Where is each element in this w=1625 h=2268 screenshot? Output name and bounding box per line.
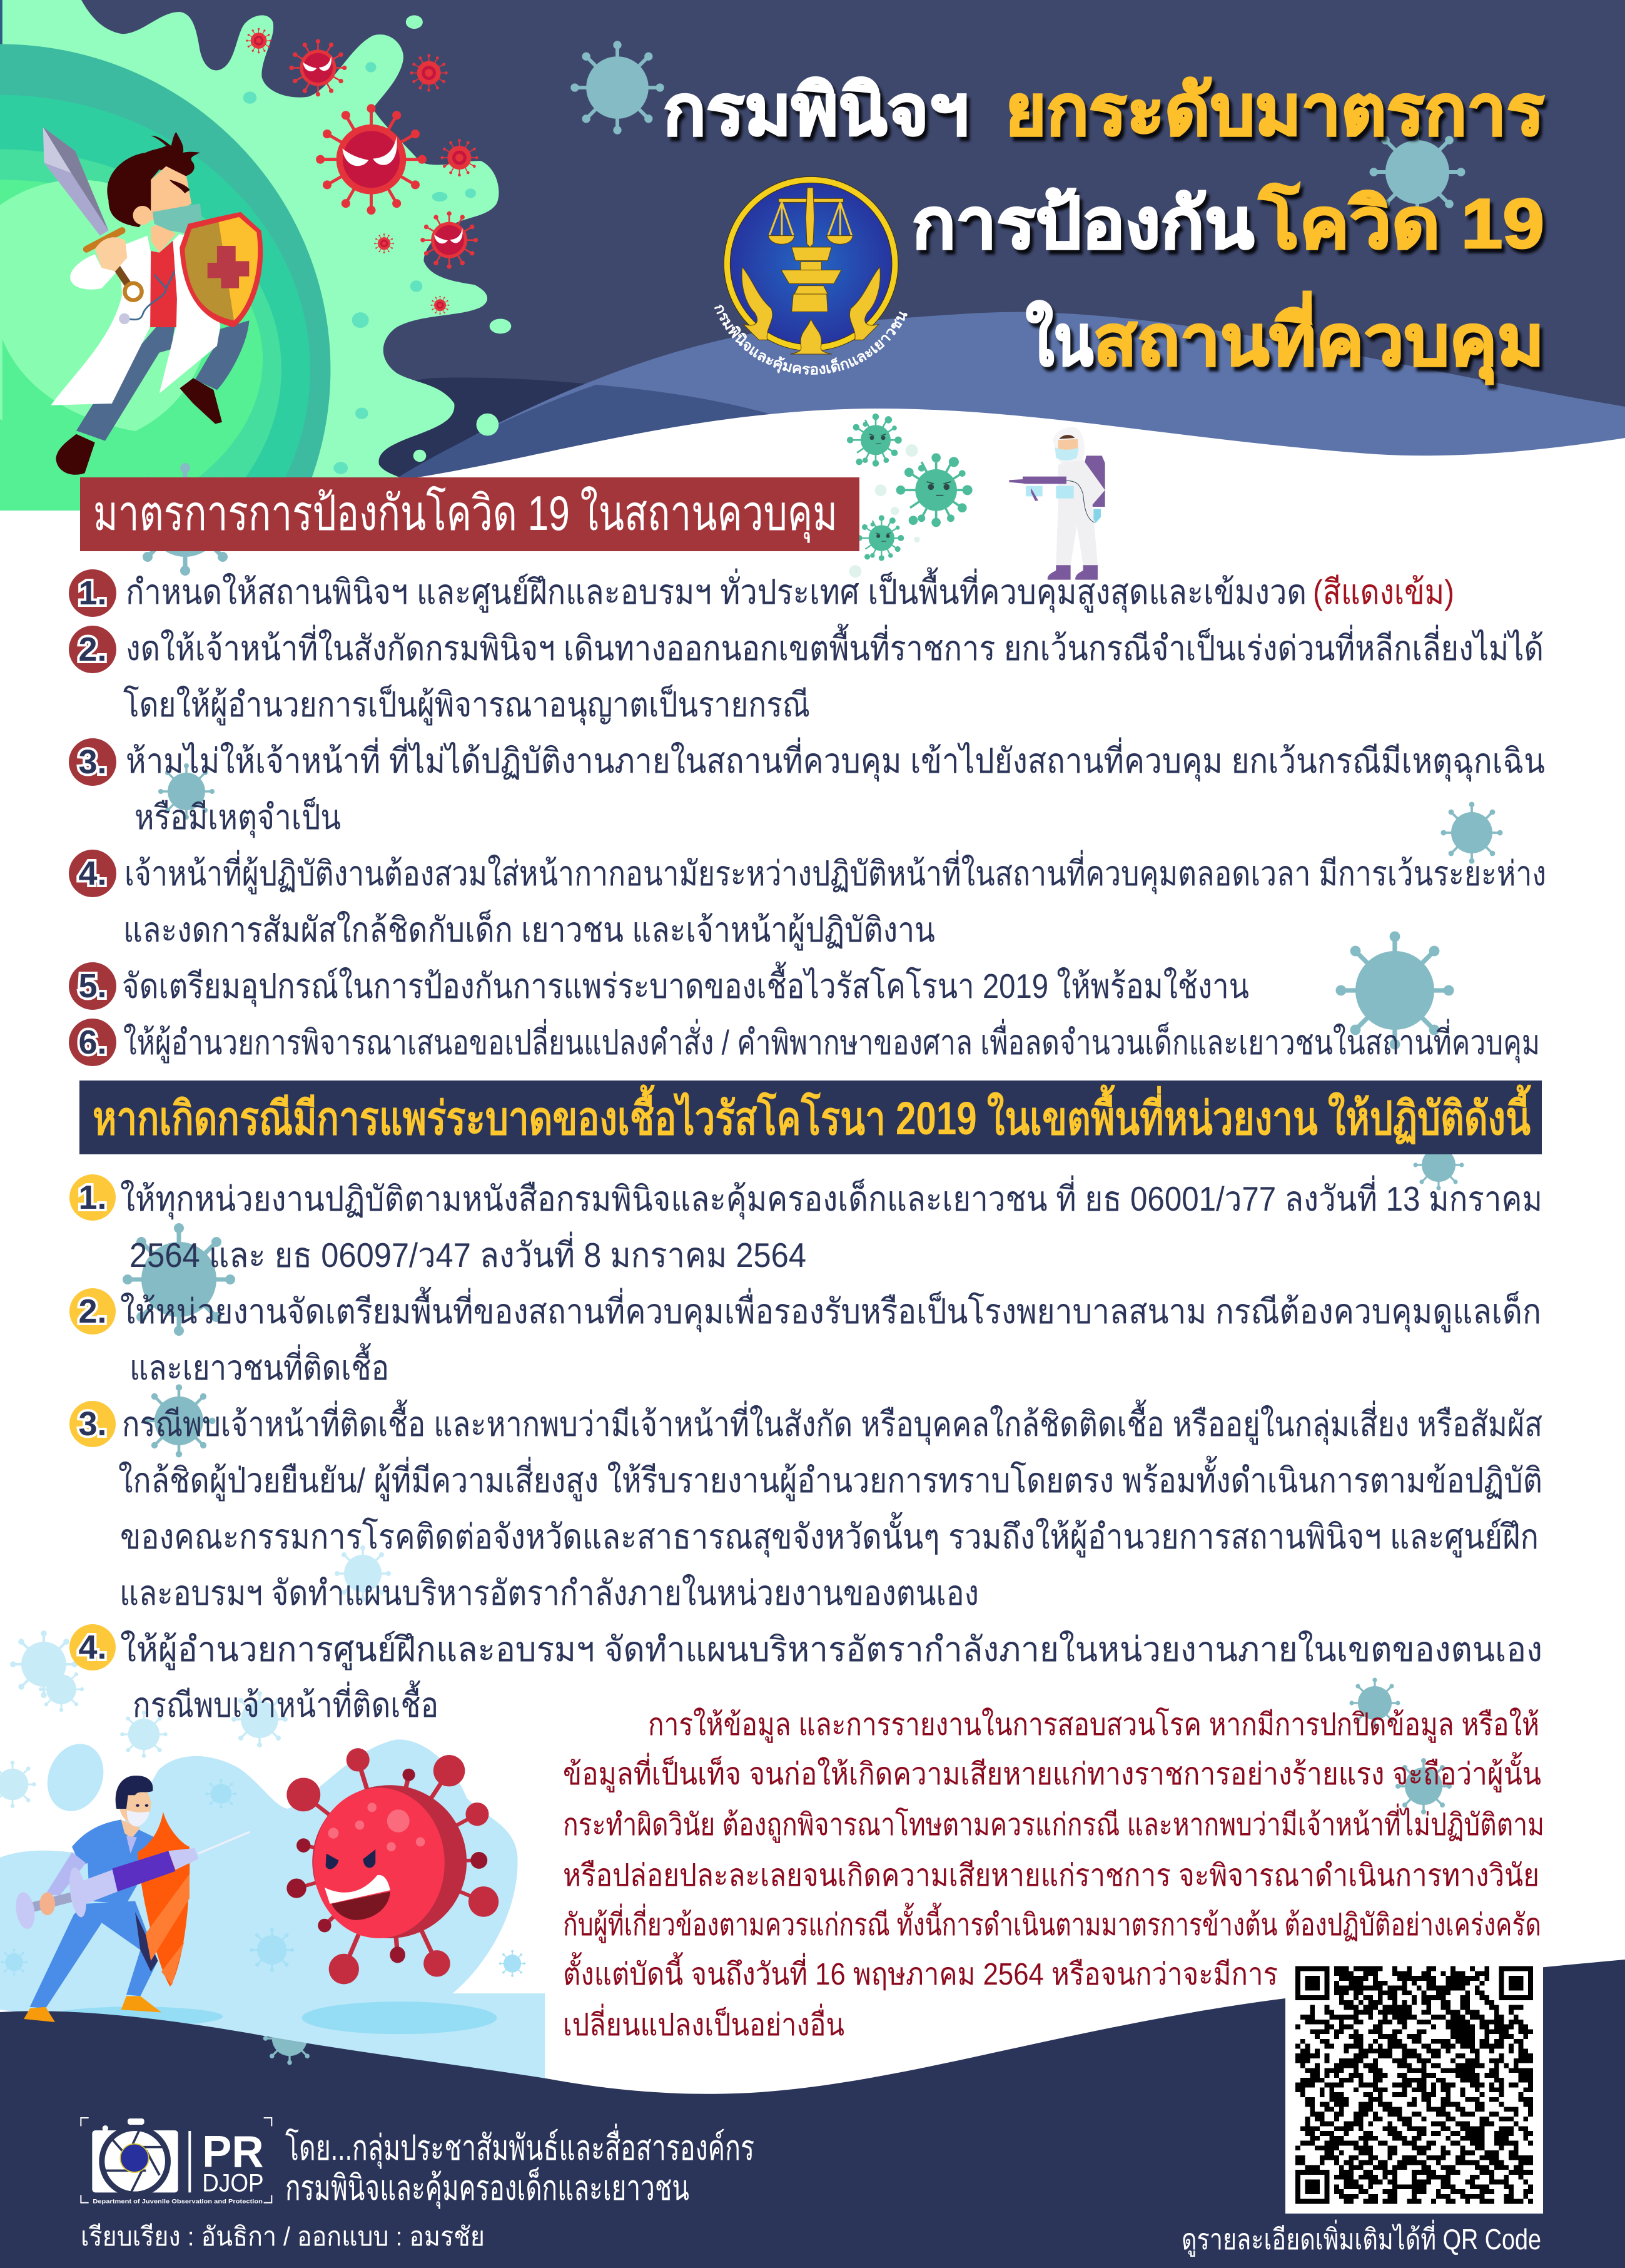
white wave: [400, 409, 1625, 563]
blob spots: [243, 62, 476, 474]
badge 5: 5.: [78, 967, 107, 1005]
logo: PR DJOP: [81, 2118, 271, 2204]
navy section heading band: [79, 1081, 1542, 1154]
top navy background: [0, 0, 1625, 510]
footer organisation text: โดย...กลุ่มประชาสัมพันธ์และสื่อสารองค์กร: [285, 2123, 754, 2169]
illustration: nurse with syringe and shield: [14, 1776, 250, 2022]
measure 1 text: กำหนดให้สถานพินิจฯ และศูนย์ฝึกและอบรมฯ ทั่วประเทศ เป็นพื้นที่ควบคุมสูงสุดและเข้มงวด: [126, 567, 1307, 613]
step 4 text: ให้ผู้อำนวยการศูนย์ฝึกและอบรมฯ จัดทำแผนบริหารอัตรากำลังภายในหน่วยงานภายในเขตของตนเอง: [120, 1630, 1542, 1670]
badge 1: [69, 1174, 116, 1221]
mid blue wave overlap: [391, 385, 807, 482]
illustration: angry red virus: [286, 1748, 499, 1984]
measure 1 text: (สีแดงเข้ม): [1313, 572, 1454, 611]
step 1 text: 2564 และ ยธ 06097/ว47 ลงวันที่ 8 มกราคม 2564: [129, 1231, 806, 1274]
dark wave: [350, 378, 807, 494]
badge 2: 2.: [78, 631, 107, 668]
panel: light blue illustration backdrop: [0, 1739, 545, 2080]
QR caption: ดูรายละเอียดเพิ่มเติมได้ที่ QR Code: [1182, 2219, 1541, 2257]
measure 2 text: โดยให้ผู้อำนวยการเป็นผู้พิจารณาอนุญาตเป็นรายกรณี: [123, 684, 810, 726]
teal virus decorations: [123, 41, 1502, 1814]
red notice paragraph: ตั้งแต่บัดนี้ จนถึงวันที่ 16 พฤษภาคม 2564 หรือจนกว่าจะมีการ: [563, 1952, 1278, 1991]
step 4 text: กรณีพบเจ้าหน้าที่ติดเชื้อ: [133, 1681, 438, 1724]
badge 6: 6.: [78, 1024, 107, 1061]
measure 4 text: และงดการสัมผัสใกล้ชิดกับเด็ก เยาวชน และเจ้าหน้าผู้ปฏิบัติงาน: [123, 910, 935, 951]
panel: green blob with doctor: [0, 0, 512, 511]
red notice paragraph: หรือปล่อยปละละเลยจนเกิดความเสียหายแก่ราชการ จะพิจารณาดำเนินการทางวินัย: [563, 1859, 1539, 1893]
measure 3 text: [126, 737, 1545, 838]
teal virus on navy wave: [263, 2036, 310, 2065]
logo: PR DJOP: Department of Juvenile Observation and Protection: [93, 2198, 263, 2204]
badge 1: [69, 569, 116, 617]
badge 1: 1.: [78, 574, 107, 612]
light blue virus decorations: [0, 1545, 391, 1808]
step 3 text: และอบรมฯ จัดทำแผนบริหารอัตรากำลังภายในหน่วยงานของตนเอง: [119, 1574, 979, 1612]
logo: department seal: [714, 176, 908, 375]
light blue wave: [391, 312, 1625, 501]
footer organisation text: กรมพินิจและคุ้มครองเด็กและเยาวชน: [285, 2167, 689, 2209]
red notice paragraph: [563, 1707, 1544, 2042]
step 3 text: [118, 1400, 1542, 1612]
red section heading band: มาตรการการป้องกันโควิด 19 ในสถานควบคุม: [93, 486, 838, 543]
footer credits: เรียบเรียง : อันธิกา / ออกแบบ : อมรชัย: [81, 2222, 485, 2251]
illustration: green viruses: [847, 414, 973, 577]
step 1 text: [120, 1175, 1542, 1274]
red notice paragraph: เปลี่ยนแปลงเป็นอย่างอื่น: [563, 2003, 844, 2042]
bottom navy wave: [0, 1960, 1625, 2268]
measure 5 text: จัดเตรียมอุปกรณ์ในการป้องกันการแพร่ระบาดของเชื้อไวรัสโคโรนา 2019 ให้พร้อมใช้งาน: [122, 962, 1249, 1007]
badge 3: 3.: [78, 1405, 107, 1443]
title: [663, 71, 1544, 385]
badge 5: [69, 962, 116, 1010]
title: โควิด 19: [1258, 183, 1544, 263]
logo: PR DJOP: DJOP: [202, 2170, 264, 2197]
illustration: sprayer in protective suit: [1009, 427, 1105, 580]
red section heading band: [80, 477, 859, 551]
badge 3: [69, 1401, 116, 1447]
logo: department seal: กรมพินิจและคุ้มครองเด็กและเยาวชน: [714, 305, 908, 375]
title: การป้องกัน: [912, 185, 1254, 263]
logo: PR DJOP: PR: [202, 2127, 264, 2177]
step 2 text: และเยาวชนที่ติดเชื้อ: [129, 1343, 389, 1387]
badge 1: 1.: [78, 1179, 107, 1216]
nurse shoe over wave: [24, 2007, 55, 2022]
QR code: [1285, 1958, 1543, 2214]
measure 4 text: [123, 850, 1546, 951]
badge 2: [69, 626, 116, 673]
measure 3 text: หรือมีเหตุจำเป็น: [134, 797, 341, 838]
panel: outbreak steps: [69, 1174, 1542, 1724]
title: ยกระดับมาตรการ: [1005, 71, 1544, 150]
title: กรมพินิจฯ: [663, 71, 969, 150]
badge 3: [69, 738, 116, 786]
red viruses: [246, 28, 478, 315]
title: สถานที่ควบคุม: [1093, 291, 1544, 385]
badge 3: 3.: [78, 743, 107, 781]
badge 4: 4.: [78, 1629, 107, 1666]
badge 2: [69, 1288, 116, 1335]
badge 6: [69, 1019, 116, 1066]
badge 2: 2.: [78, 1293, 107, 1330]
panel: measures list: [69, 567, 1546, 1066]
step 4 text: [120, 1630, 1542, 1724]
badge 4: 4.: [78, 855, 107, 892]
red notice paragraph: ข้อมูลที่เป็นเท็จ จนก่อให้เกิดความเสียหายแก่ทางราชการอย่างร้ายแรง จะถือว่าผู้นั้น: [563, 1752, 1541, 1793]
badge 4: [69, 850, 116, 897]
badge 4: [69, 1624, 116, 1670]
measure 2 text: [123, 624, 1544, 726]
title: ใน: [1026, 301, 1093, 380]
step 2 text: [120, 1287, 1541, 1387]
illustration: doctor with sword and shield: [43, 127, 263, 475]
footer organisation text: [285, 2123, 754, 2209]
